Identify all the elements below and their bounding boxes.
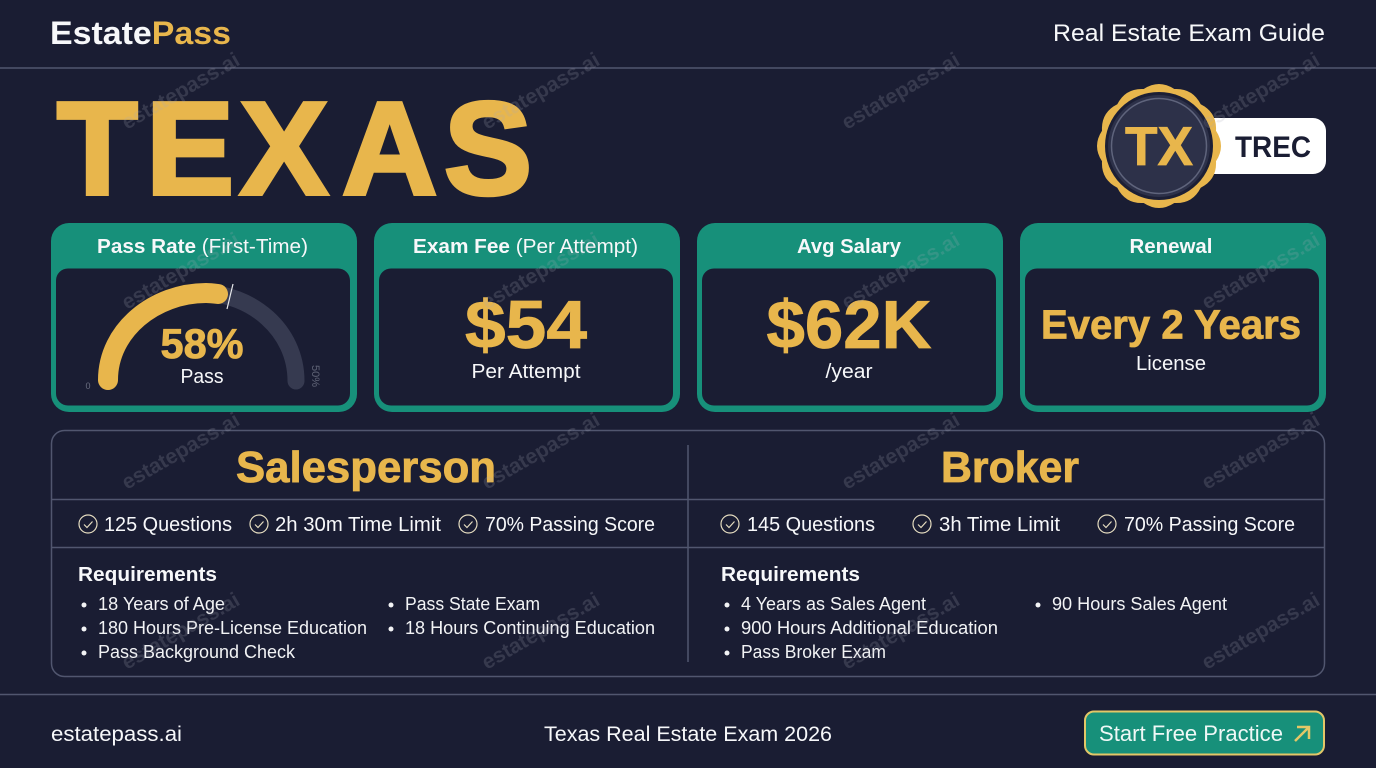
broker requirements: Pass Broker Exam	[741, 642, 886, 662]
watermarks: estatepass.ai	[838, 588, 964, 674]
gauge chart: 58 percent: 0	[85, 381, 91, 391]
watermarks: estatepass.ai	[1198, 228, 1324, 314]
icon: arrow	[1295, 727, 1309, 741]
salesperson requirements: Pass Background Check	[98, 642, 296, 662]
salesperson stats: 125 Questions	[104, 514, 232, 536]
broker stats: 70% Passing Score	[1124, 514, 1295, 536]
footer: website: estatepass.ai	[51, 723, 182, 746]
watermarks: estatepass.ai	[838, 48, 964, 134]
watermarks: estatepass.ai	[1198, 48, 1324, 134]
salesperson stats	[79, 514, 655, 536]
salesperson requirements: Pass State Exam	[405, 594, 540, 614]
salesperson requirements: 18 Years of Age	[98, 594, 225, 614]
badge: TREC label: TREC	[1235, 131, 1311, 164]
salesperson stats: 2h 30m Time Limit	[275, 514, 441, 536]
salary label: /year	[826, 361, 873, 383]
watermarks	[118, 48, 1324, 674]
salary value: $62K	[766, 287, 932, 363]
watermarks: estatepass.ai	[118, 588, 244, 674]
card heading: salary: Avg Salary	[797, 236, 902, 258]
gauge value: 58%	[160, 320, 244, 367]
broker stats: 3h Time Limit	[939, 514, 1060, 536]
watermarks: estatepass.ai	[478, 588, 604, 674]
heading: Broker: Broker	[941, 443, 1079, 492]
gauge label: Pass	[180, 366, 224, 388]
watermarks: estatepass.ai	[478, 48, 604, 134]
header subtitle: Real Estate Exam Guide	[1053, 20, 1325, 47]
button: start free practice	[1085, 712, 1324, 754]
exam fee value: $54	[465, 287, 587, 363]
badge: TREC label	[1196, 118, 1326, 174]
watermarks: estatepass.ai	[1198, 408, 1324, 494]
broker requirements: 90 Hours Sales Agent	[1052, 594, 1227, 614]
broker stats	[721, 514, 1295, 536]
badge: TX seal	[1097, 84, 1221, 208]
renewal value: Every 2 Years	[1041, 302, 1301, 348]
watermarks: estatepass.ai	[478, 228, 604, 314]
salesperson requirements: 18 Hours Continuing Education	[405, 618, 655, 638]
card heading: pass rate: Pass Rate (First-Time)	[97, 236, 308, 258]
card heading: renewal: Renewal	[1130, 236, 1212, 258]
exam fee label: Per Attempt	[472, 361, 581, 383]
watermarks: estatepass.ai	[118, 48, 244, 134]
broker stats: 145 Questions	[747, 514, 875, 536]
panel: renewal card	[1020, 223, 1326, 412]
panel: license comparison	[52, 430, 1324, 676]
panel: average salary card	[697, 223, 1003, 412]
watermarks: estatepass.ai	[478, 408, 604, 494]
card heading: exam fee: Exam Fee (Per Attempt)	[413, 236, 638, 258]
broker requirements: 4 Years as Sales Agent	[741, 594, 926, 614]
watermarks: estatepass.ai	[838, 228, 964, 314]
panel: pass rate card	[51, 223, 357, 412]
button: start free practice: Start Free Practice	[1099, 721, 1283, 746]
watermarks: estatepass.ai	[118, 228, 244, 314]
salesperson requirements: 180 Hours Pre-License Education	[98, 618, 367, 638]
salesperson requirements: Requirements	[78, 564, 217, 586]
footer: exam year: Texas Real Estate Exam 2026	[544, 723, 832, 746]
gauge chart: 58 percent: 50%	[309, 365, 321, 387]
title: TEXAS: TEXAS	[57, 75, 532, 222]
renewal label: License	[1136, 353, 1206, 375]
broker requirements	[721, 564, 1227, 662]
watermarks: estatepass.ai	[118, 408, 244, 494]
salesperson stats: 70% Passing Score	[485, 514, 655, 536]
watermarks: estatepass.ai	[1198, 588, 1324, 674]
watermarks: estatepass.ai	[838, 408, 964, 494]
logo: EstatePass: EstatePass	[50, 15, 231, 51]
broker requirements: Requirements	[721, 564, 860, 586]
broker requirements: 900 Hours Additional Education	[741, 618, 998, 638]
heading: Salesperson: Salesperson	[236, 443, 496, 492]
gauge chart: 58 percent	[85, 284, 321, 391]
panel: exam fee card	[374, 223, 680, 412]
badge: TX seal: TX	[1125, 115, 1193, 177]
salesperson requirements	[78, 564, 655, 662]
